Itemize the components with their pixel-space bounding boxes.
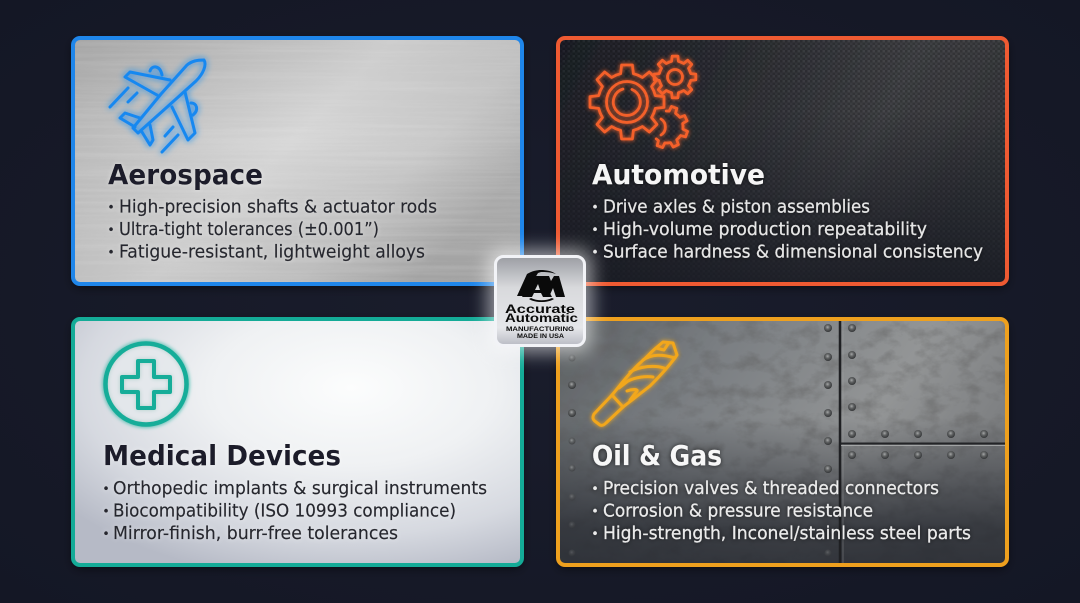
- text block: aerospace bullets: [108, 196, 437, 262]
- text: company name: Accurate: [505, 304, 575, 316]
- icon: medical cross: [106, 344, 186, 424]
- heading: Aerospace: Aerospace: [108, 158, 263, 191]
- text block: oil and gas bullets: High-strength, Inconel/stainless steel parts: [603, 523, 971, 544]
- text block: medical bullets: [102, 478, 487, 544]
- heading: Oil & Gas: Oil & Gas: [592, 439, 722, 472]
- icon: AM logo mark: [517, 270, 565, 302]
- panel: medical devices: [73, 319, 522, 565]
- heading: Medical Devices: Medical Devices: [103, 439, 341, 472]
- text block: aerospace bullets: •: [108, 200, 115, 214]
- text block: automotive bullets: •: [592, 200, 599, 214]
- text: company name: Automatic: [505, 313, 579, 325]
- text: company name: [505, 304, 579, 340]
- text block: oil and gas bullets: •: [592, 504, 599, 518]
- text block: aerospace bullets: Ultra-tight tolerances (±0.001”): [119, 219, 379, 240]
- text block: medical bullets: Biocompatibility (ISO 10993 compliance): [113, 500, 456, 522]
- icon: gears: [590, 56, 696, 149]
- text: company name: MANUFACTURING: [506, 326, 574, 333]
- text block: automotive bullets: High-volume production repeatability: [603, 219, 927, 240]
- text block: medical bullets: Mirror-finish, burr-free tolerances: [113, 523, 398, 544]
- icon: airplane: [110, 60, 205, 152]
- text block: oil and gas bullets: Precision valves & threaded connectors: [603, 478, 939, 499]
- text block: aerospace bullets: Fatigue-resistant, lightweight alloys: [119, 242, 425, 262]
- text block: medical bullets: •: [102, 504, 110, 518]
- panel: aerospace: [73, 38, 522, 284]
- text block: medical bullets: Orthopedic implants & surgical instruments: [113, 478, 487, 499]
- text block: automotive bullets: Surface hardness & dimensional consistency: [603, 242, 983, 262]
- text block: oil and gas bullets: [592, 478, 971, 544]
- heading: Automotive: Automotive: [592, 158, 765, 191]
- text block: aerospace bullets: •: [108, 223, 115, 237]
- text block: medical bullets: •: [102, 482, 110, 496]
- text block: automotive bullets: •: [592, 246, 599, 260]
- text: company name: MADE IN USA: [517, 333, 564, 340]
- text block: aerospace bullets: High-precision shafts & actuator rods: [119, 196, 437, 218]
- panel: automotive: [558, 38, 1007, 284]
- text block: automotive bullets: •: [592, 223, 599, 237]
- text block: aerospace bullets: •: [108, 246, 115, 260]
- text block: oil and gas bullets: •: [592, 527, 599, 541]
- text block: oil and gas bullets: •: [592, 482, 599, 496]
- logo badge: [488, 249, 592, 353]
- text block: automotive bullets: [592, 196, 983, 262]
- text block: oil and gas bullets: Corrosion & pressure resistance: [603, 500, 873, 522]
- text block: medical bullets: •: [102, 527, 110, 541]
- text block: automotive bullets: Drive axles & piston assemblies: [603, 196, 870, 218]
- icon: drill bit: [593, 342, 677, 425]
- panel: oil and gas: [558, 319, 1007, 565]
